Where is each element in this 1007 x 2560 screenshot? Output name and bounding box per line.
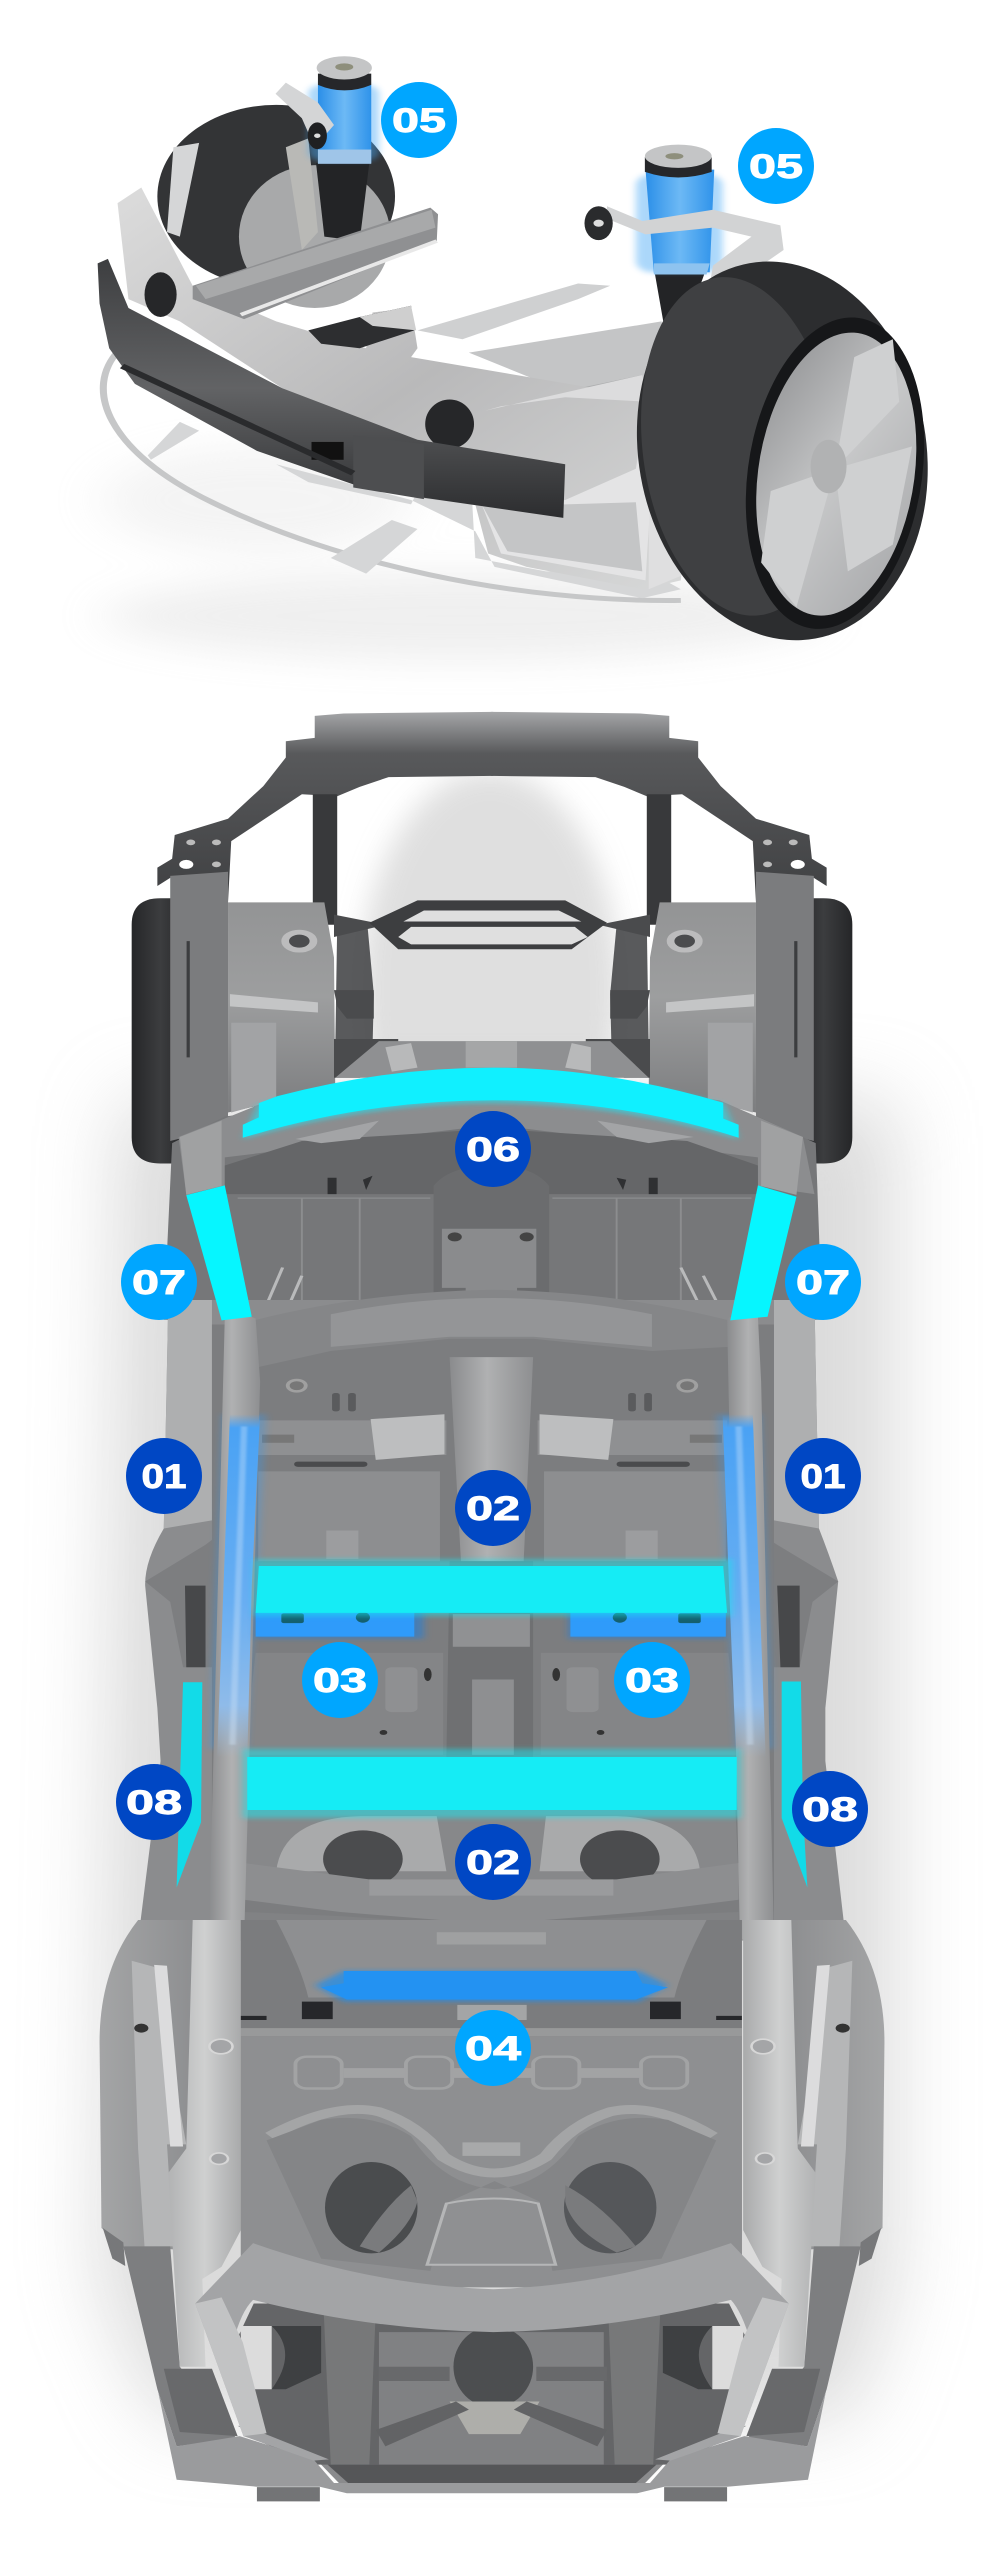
blue bar 04 [321, 1971, 668, 2000]
cowl panel [179, 1072, 814, 1194]
decklid arch [195, 2243, 789, 2461]
badge: 08 right [792, 1771, 868, 1847]
left air spring [276, 56, 379, 241]
shadow through front opening [360, 770, 620, 1210]
bumper beam [98, 259, 565, 518]
cyan pillar 07 right [730, 1185, 796, 1320]
badge: 05 left: 05 [392, 102, 446, 140]
blue rail 01 left [217, 1414, 260, 1757]
ground shadow [103, 446, 822, 661]
firewall lower [335, 1041, 649, 1078]
cyan pillar 07 left [186, 1185, 252, 1320]
curved pressing [270, 2109, 713, 2173]
long rail left [209, 1315, 260, 1940]
badge: 01 left [126, 1438, 202, 1514]
badge: 01 right [785, 1438, 861, 1514]
badge: 07 right: 07 [796, 1264, 850, 1302]
blue panels 03 [256, 1610, 726, 1639]
cyan band lower [247, 1757, 737, 1810]
cyan strip 08 left [177, 1682, 202, 1888]
badge: 07 right [785, 1244, 861, 1320]
centre tab [427, 2198, 556, 2265]
lower body base [238, 2426, 746, 2491]
floor pressing lines [238, 1198, 751, 1316]
badge: 03 left [302, 1642, 378, 1718]
figure: body-in-white rear section [100, 1920, 884, 2501]
badge: 07 left [121, 1244, 197, 1320]
figure: body-in-white front section [132, 712, 852, 1320]
badge: 01 left: 01 [142, 1458, 186, 1496]
cyan arc 06 [243, 1068, 739, 1138]
rear bottom valance [158, 2391, 826, 2493]
cyan strip 08 right [782, 1681, 807, 1888]
left rear wheel [157, 105, 395, 308]
cowl dashes [295, 1121, 694, 1143]
badge: 05 right: 05 [749, 148, 803, 186]
ring frame [103, 350, 681, 600]
badge: 08 left: 08 [126, 1784, 182, 1822]
shadow behind car body [100, 1100, 895, 2420]
cyan arc 06 glow [243, 1073, 739, 1139]
crash structure silver [118, 187, 700, 589]
rear cross bar [244, 1863, 739, 1924]
blue rail 01 right [723, 1414, 766, 1757]
badge: 07 left: 07 [132, 1264, 186, 1302]
small bracket [437, 1932, 546, 1944]
badge: 04: 04 [465, 2030, 521, 2068]
badge: 02 upper: 02 [466, 1490, 520, 1528]
lower panel [244, 1912, 739, 1940]
badge: 03 right [614, 1642, 690, 1718]
speaker hole left [325, 2162, 417, 2253]
badge: 01 right: 01 [800, 1458, 846, 1496]
badge: 02 upper [455, 1470, 531, 1546]
badge: 03 left: 03 [313, 1662, 367, 1700]
trunk well [234, 2304, 750, 2465]
badge: 05 left [381, 82, 457, 158]
body floor front [164, 1084, 822, 1320]
upper brace [369, 900, 607, 949]
badge: 08 right: 08 [802, 1791, 858, 1829]
ring struts [148, 422, 681, 598]
badge: 08 left [116, 1764, 192, 1840]
black blocks [302, 2002, 681, 2019]
long rail right [727, 1315, 774, 1940]
front frame, wheelhouses and tires [132, 712, 852, 1163]
right front wheel [619, 255, 946, 647]
badge: 06 [455, 1111, 531, 1187]
badge: 04 [455, 2010, 531, 2086]
rear body flanks and quarter panels [100, 1920, 884, 2446]
speaker hole right [564, 2162, 656, 2253]
badge: 05 right [738, 128, 814, 204]
rounded bumps [295, 2057, 687, 2089]
side windows [240, 2326, 744, 2389]
holes [328, 1176, 658, 1194]
figure: body-in-white middle section [138, 1185, 846, 1941]
right air spring [584, 145, 784, 353]
blue rail left glow [209, 1414, 267, 1749]
rear wheel wells [244, 1810, 739, 1888]
channel beam [193, 208, 438, 319]
badge: 06: 06 [466, 1131, 520, 1169]
cross member [254, 1290, 729, 1367]
upper shelf [241, 1920, 742, 2028]
badge: 02 lower [455, 1824, 531, 1900]
figure: front suspension assembly [98, 56, 946, 661]
central tunnel front [434, 1166, 549, 1320]
badge: 03 right: 03 [625, 1662, 679, 1700]
rear base panel [241, 1920, 742, 2287]
cyan band lower glow [243, 1749, 741, 1818]
central tunnel [450, 1357, 533, 1565]
rear parcel shelf [241, 2028, 742, 2036]
rail highlights [233, 1426, 750, 1745]
trunk details [324, 2312, 660, 2465]
blue rail right glow [716, 1414, 774, 1749]
cyan band upper glow [254, 1559, 732, 1616]
cyan band upper [256, 1566, 727, 1613]
floor base [212, 1324, 774, 1940]
blue bar 04 glow [315, 1971, 668, 2002]
mirrored floor panels [244, 1380, 740, 1755]
badge: 02 lower: 02 [466, 1844, 520, 1882]
latches [257, 2487, 727, 2501]
centre chassis floor [469, 321, 668, 451]
outer sill [138, 1300, 846, 1941]
